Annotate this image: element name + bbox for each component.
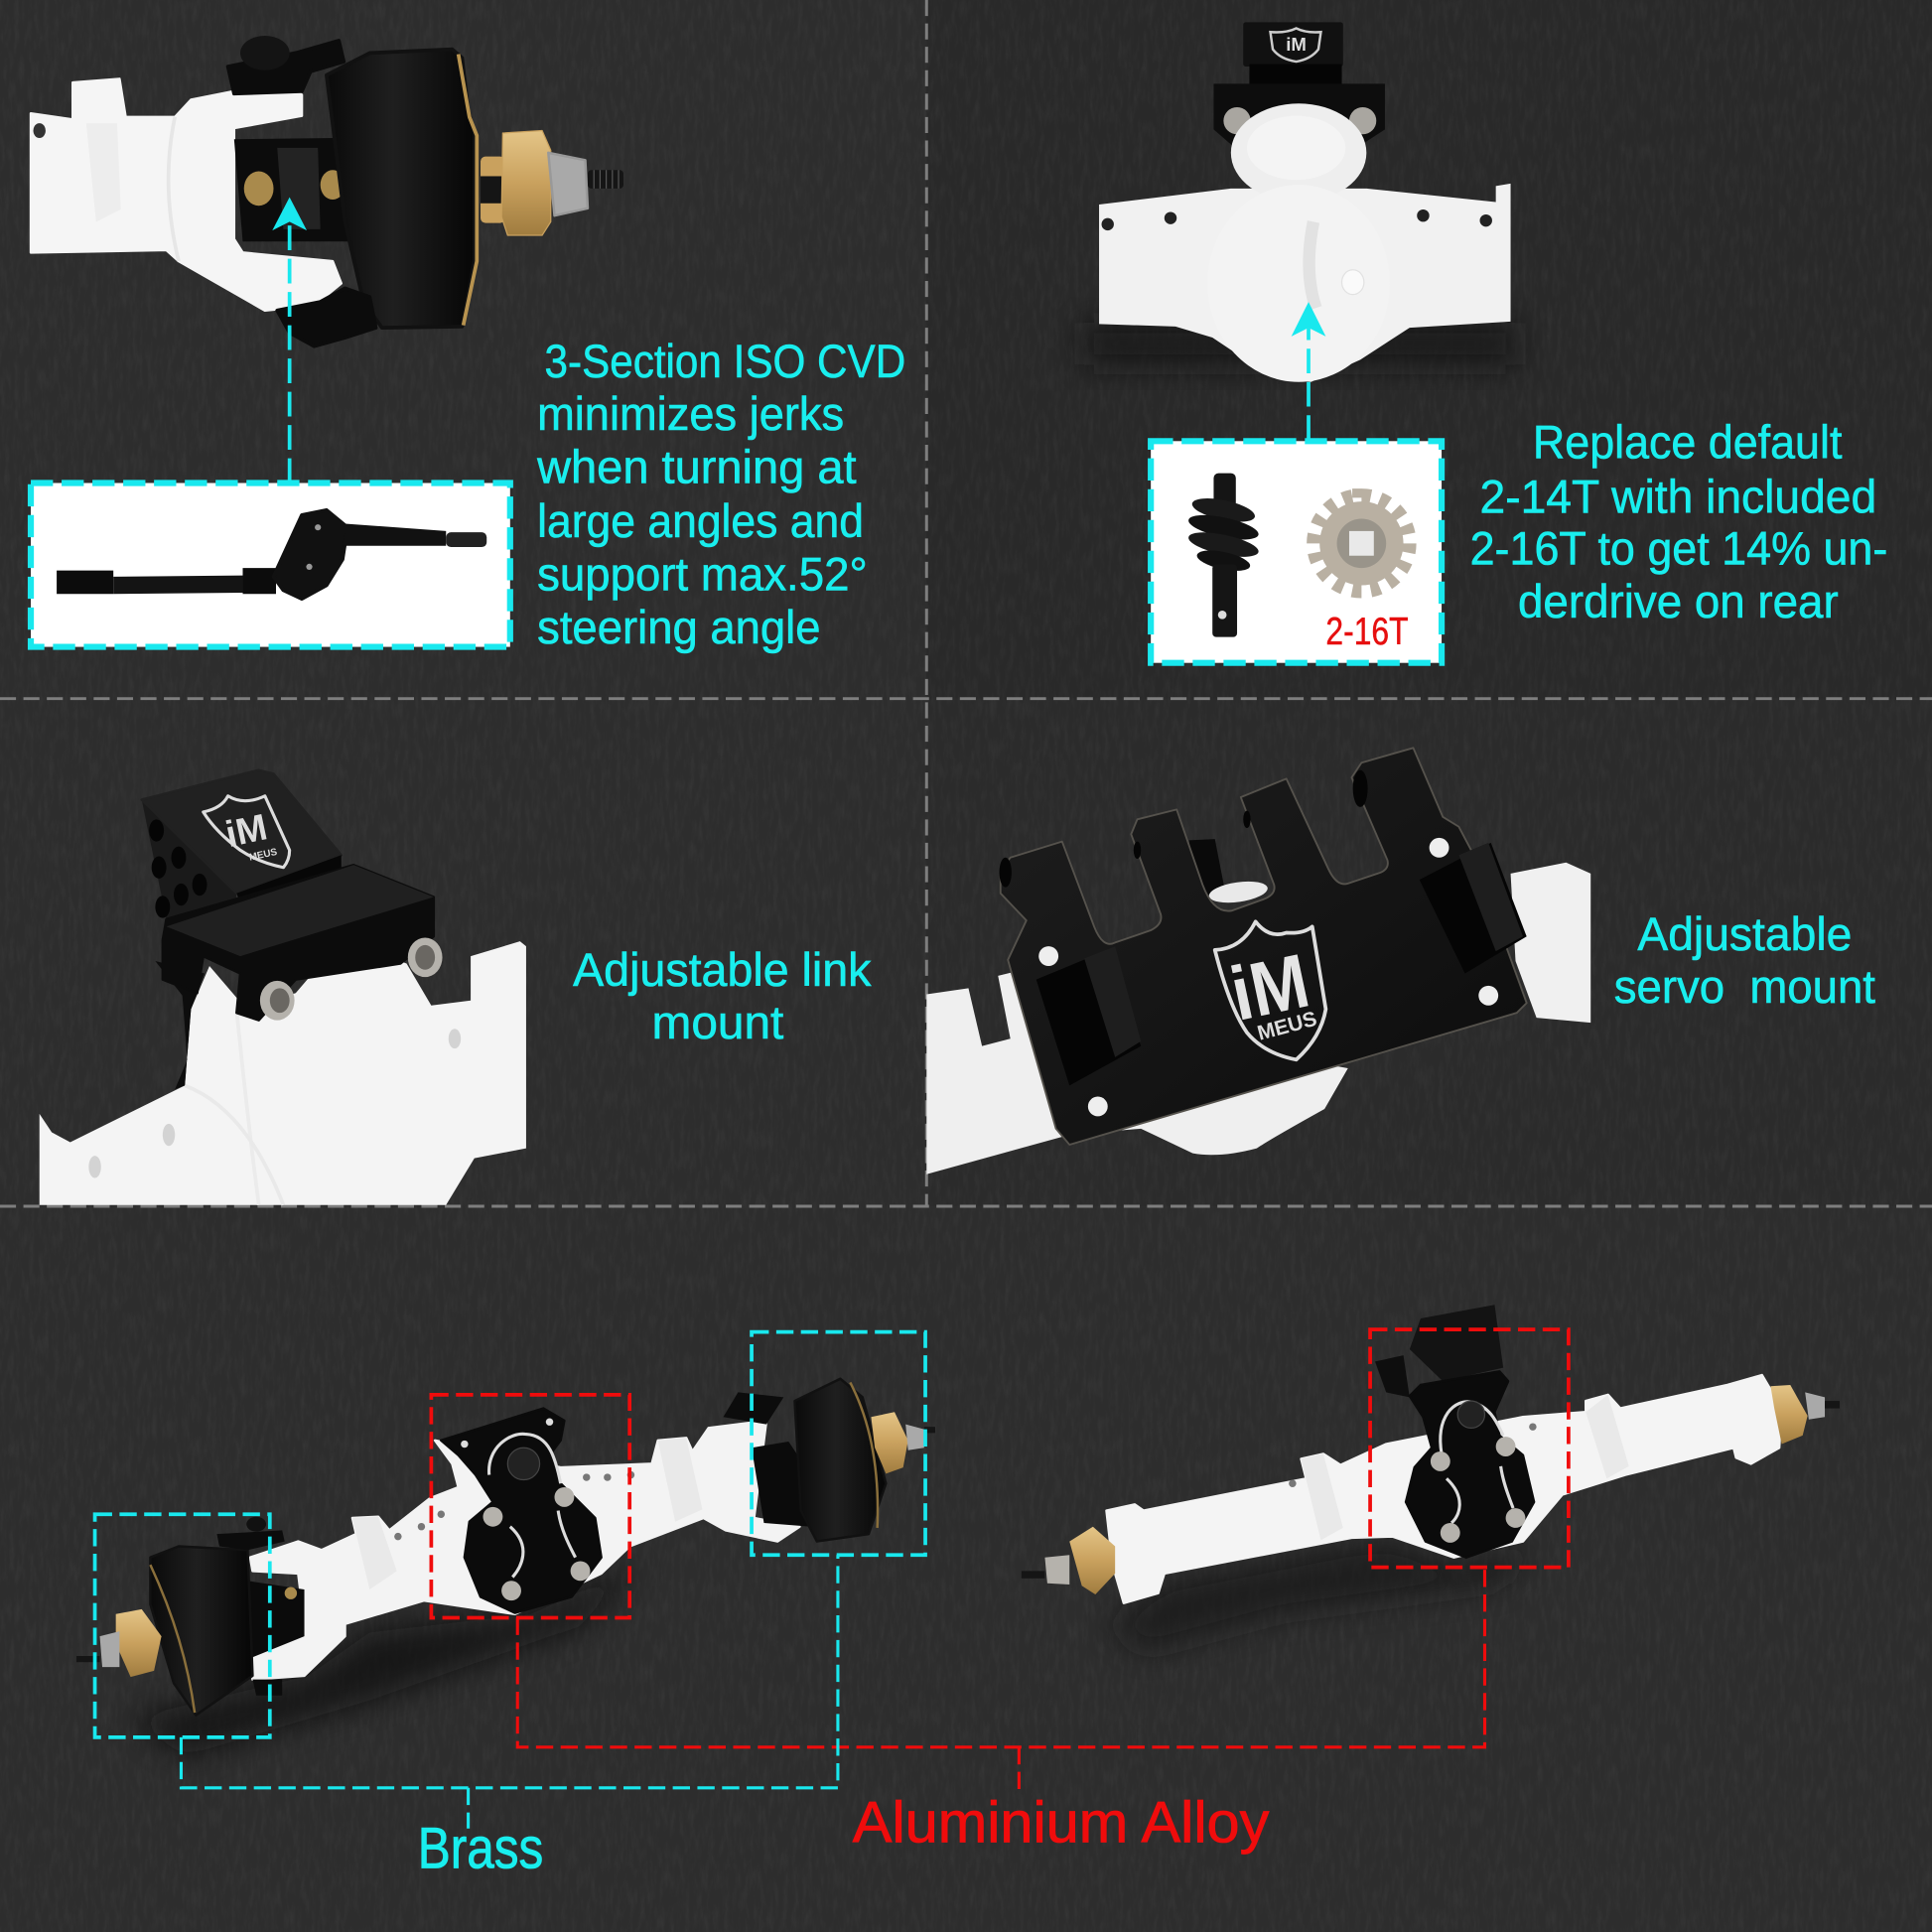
text: CVD description: when turning at — [536, 440, 857, 492]
photo: front axle — [76, 1379, 935, 1716]
shadow: rear axle — [1109, 1543, 1528, 1651]
inset: worm and gear — [1151, 441, 1442, 663]
icon: worm shaft — [1186, 474, 1261, 637]
logo: shield: MEUS — [1255, 1008, 1319, 1045]
section dividers — [0, 0, 1932, 1206]
rail: right — [1420, 843, 1527, 973]
shadow: front axle — [129, 1565, 640, 1756]
logo: shield: MEUS — [248, 847, 279, 864]
text: CVD description: minimizes jerks — [537, 387, 844, 440]
text: gear description — [1470, 416, 1887, 627]
text: adjustable link mount: mount — [652, 996, 783, 1048]
text: gear description: 2-14T with included — [1480, 470, 1876, 522]
photo: link mount on axle — [40, 770, 526, 1205]
text: gear description: derdrive on rear — [1518, 575, 1839, 627]
label: 2-16T: 2-16T — [1325, 611, 1409, 653]
box: left brass hub — [95, 1514, 270, 1737]
text: adjustable servo mount: Adjustable — [1637, 907, 1852, 960]
right drum and nut — [724, 1379, 935, 1542]
icon: 16T gear — [1315, 497, 1407, 589]
inset: CVD shaft — [31, 483, 510, 647]
text: CVD description: steering angle — [537, 601, 821, 653]
left drum and nut — [76, 1517, 305, 1716]
rail: left — [1036, 950, 1141, 1085]
label: brass: Brass — [418, 1816, 543, 1880]
logo: shield — [204, 796, 290, 868]
link mount and cover — [1375, 1305, 1534, 1558]
panel: front axle materials — [76, 1332, 935, 1756]
text: CVD description: 3-Section ISO CVD — [545, 335, 905, 387]
panel: underdrive gears — [1084, 22, 1887, 663]
text: CVD description — [536, 335, 905, 653]
arrow: from gear inset to axle — [1292, 302, 1325, 440]
text: gear description: 2-16T to get 14% un- — [1470, 521, 1887, 574]
logo: small shield — [1271, 29, 1320, 62]
box: rear aluminium cover — [1370, 1329, 1569, 1568]
photo: rear axle — [1022, 1305, 1840, 1603]
logo: shield: iM — [1224, 938, 1316, 1037]
label: aluminium alloy: Aluminium Alloy — [853, 1790, 1270, 1855]
box: front aluminium cover — [431, 1395, 629, 1618]
panel: rear axle materials — [1022, 1305, 1840, 1651]
connector: aluminium alloy — [517, 1568, 1484, 1789]
right nut — [1770, 1385, 1840, 1445]
photo: servo mount on axle — [926, 748, 1590, 1174]
panel: adjustable link mount — [40, 770, 872, 1205]
text: adjustable link mount — [573, 943, 872, 1048]
photo: steering knuckle and drum — [31, 36, 623, 346]
diff cover plate — [441, 1409, 602, 1613]
panel: steering CVD — [31, 36, 905, 653]
logo: small shield: iM — [1286, 34, 1307, 55]
text: gear description: Replace default — [1533, 416, 1842, 469]
left nut — [1022, 1527, 1115, 1594]
photo: axle rear view with link mount — [1084, 22, 1516, 382]
text: CVD description: support max.52° — [537, 547, 868, 600]
box: right brass hub — [752, 1332, 925, 1555]
text: adjustable servo mount: servo mount — [1614, 960, 1875, 1013]
text: adjustable link mount: Adjustable link — [573, 943, 872, 996]
arrow: from CVD inset to joint — [272, 198, 307, 483]
connector: brass — [181, 1555, 838, 1829]
text: CVD description: large angles and — [537, 494, 864, 547]
logo: shield: iM — [221, 805, 271, 855]
panel: adjustable servo mount — [926, 748, 1875, 1174]
logo: shield — [1215, 921, 1325, 1059]
text: adjustable servo mount — [1614, 907, 1875, 1013]
